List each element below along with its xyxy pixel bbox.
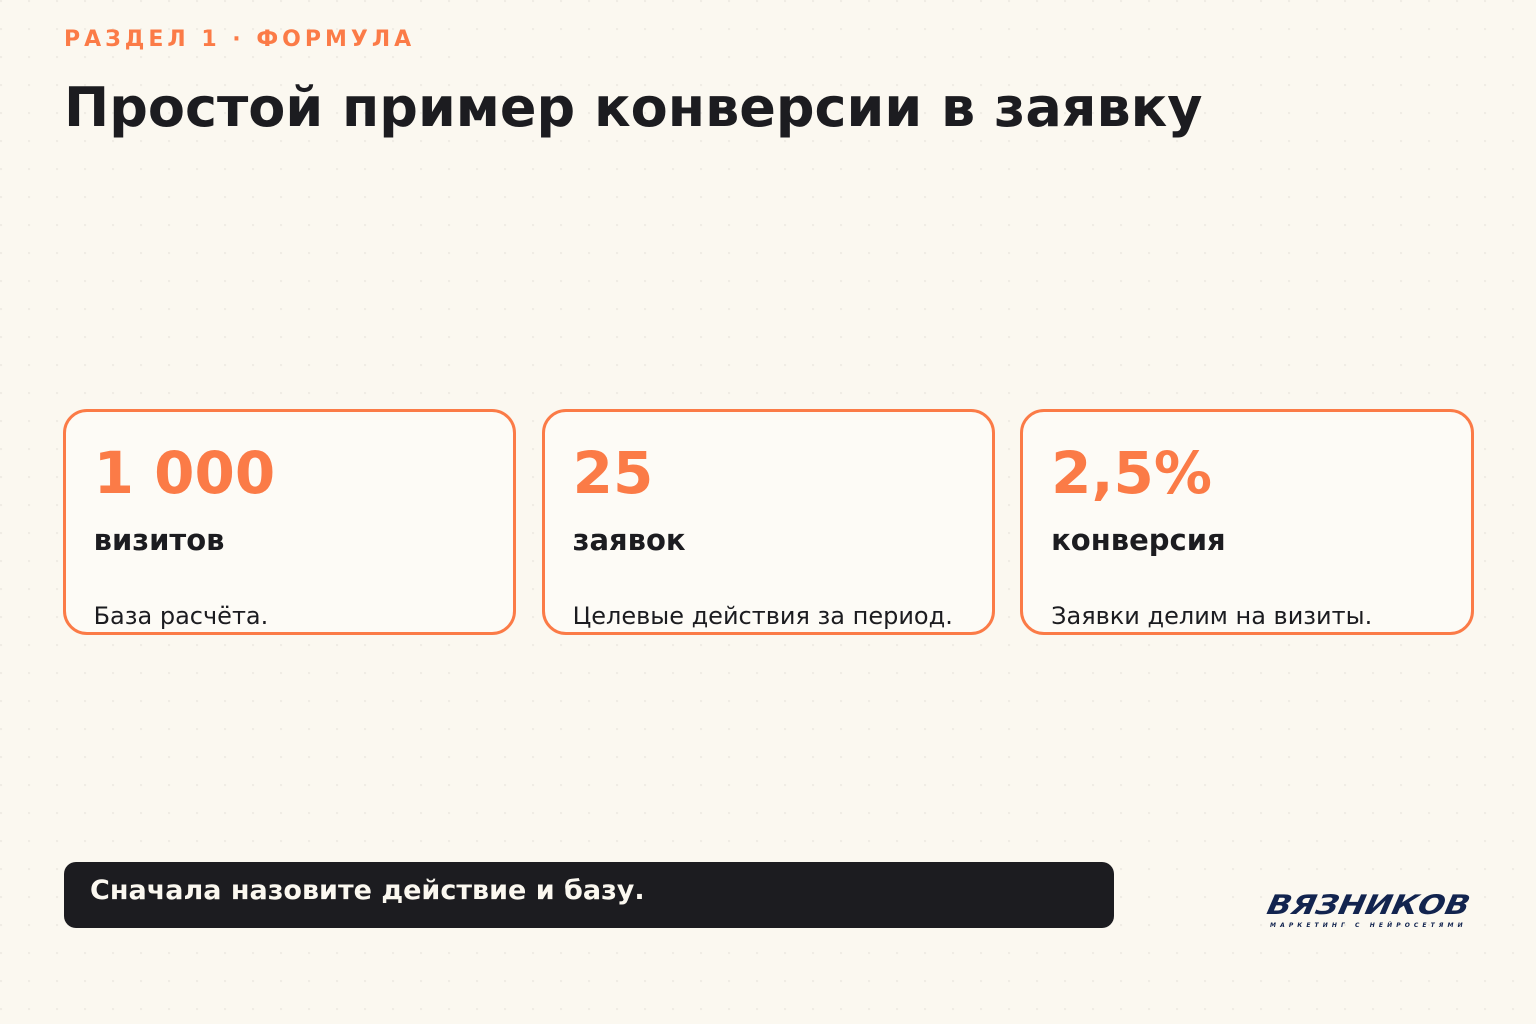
callout text: Сначала назовите действие и базу.	[90, 875, 645, 906]
description: conversion: Заявки делим на визиты.	[1051, 602, 1372, 630]
number: conversion: 2,5%	[1051, 439, 1212, 507]
panel: visits	[62, 409, 516, 635]
logo wordmark: ВЯЗНИКОВ	[1260, 890, 1476, 921]
panel: leads	[542, 409, 995, 635]
panel: conversion	[1020, 409, 1474, 635]
label: leads: заявок	[573, 523, 686, 557]
number: leads: 25	[573, 439, 653, 507]
logo tagline: МАРКЕТИНГ С НЕЙРОСЕТЯМИ	[1270, 922, 1467, 929]
description: leads: Целевые действия за период.	[573, 602, 953, 630]
label: visits: визитов	[94, 523, 225, 557]
section eyebrow: РАЗДЕЛ 1 · ФОРМУЛА	[64, 27, 415, 52]
number: visits: 1 000	[94, 439, 275, 507]
callout bar	[64, 862, 1114, 928]
title: Простой пример конверсии в заявку	[64, 76, 1202, 139]
label: conversion: конверсия	[1051, 523, 1226, 557]
description: visits: База расчёта.	[94, 602, 268, 630]
logo	[1260, 890, 1476, 929]
